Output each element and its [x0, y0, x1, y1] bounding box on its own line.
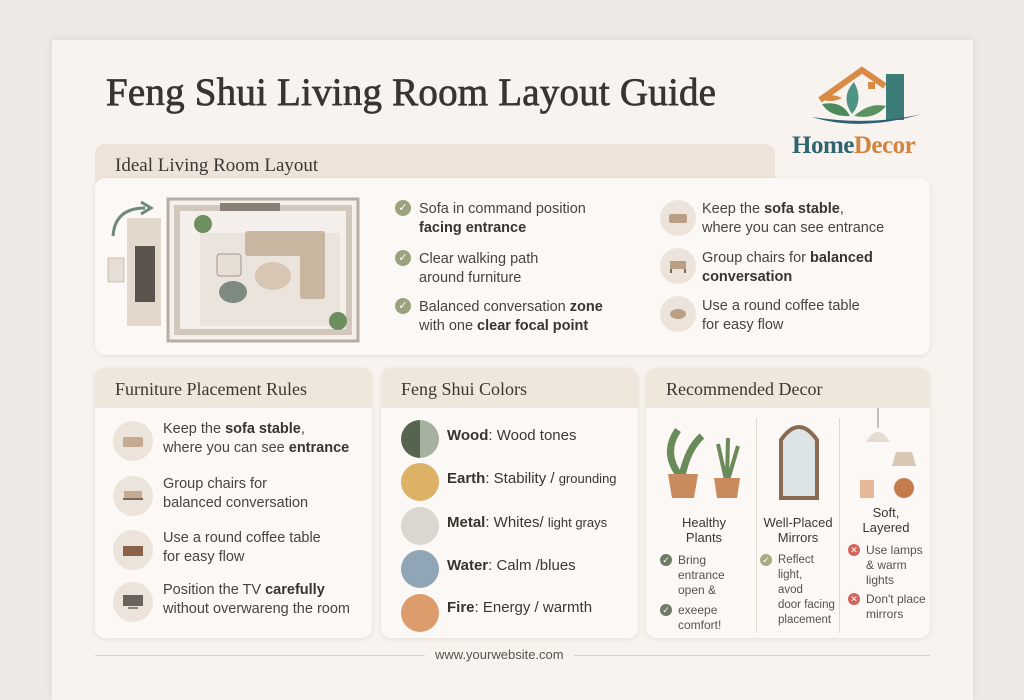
column: plants: entrance — [678, 568, 725, 582]
column: lighting — [848, 408, 926, 621]
column: lighting: Soft, — [873, 505, 899, 520]
column: mirrors: Reflect — [778, 554, 814, 566]
column: plants: open & — [678, 583, 716, 597]
column: plants — [660, 428, 740, 632]
top panel header tab: Ideal Living Room Layout — [115, 155, 318, 176]
column: plants: ✓ — [662, 605, 670, 615]
tips with icons: Group chairs for balanced — [702, 250, 873, 266]
column: plants: Healthy — [682, 515, 726, 530]
panel: furniture placement rules: balanced conversation — [163, 495, 308, 511]
column: mirrors: Well-Placed — [763, 515, 833, 530]
column: plants: Bring — [678, 553, 706, 567]
column: plants: exeepe — [678, 603, 717, 617]
top panel header tab — [95, 144, 775, 182]
panel: feng shui colors: Fire: Energy / warmth — [447, 599, 592, 616]
checklist: layout tips: Balanced conversation zone — [419, 299, 603, 315]
panel: feng shui colors: Metal: Whites/ light grays — [447, 514, 607, 531]
checklist: layout tips: ✓ — [398, 300, 408, 312]
panel: recommended decor: Recommended Decor — [666, 379, 822, 399]
column: lighting: mirrors — [866, 607, 903, 621]
title: Feng Shui Living Room Layout Guide — [106, 71, 716, 114]
column: mirrors: light, — [778, 569, 802, 581]
column: lighting: Don't place — [866, 592, 926, 606]
column: lighting: lights — [866, 573, 894, 587]
panel: feng shui colors — [381, 368, 638, 638]
footer: www.yourwebsite.com — [435, 647, 564, 662]
panel: furniture placement rules: Position the TV carefully — [163, 582, 325, 598]
column: mirrors: avod — [778, 584, 803, 596]
floor plan illustration — [108, 198, 360, 342]
panel: ideal layout — [95, 178, 930, 355]
column: lighting: ✕ — [850, 594, 858, 604]
checklist: layout tips: ✓ — [398, 252, 408, 264]
tips with icons: where you can see entrance — [702, 220, 884, 236]
column: plants: Plants — [686, 530, 722, 545]
column: lighting: & warm — [866, 558, 907, 572]
panel: furniture placement rules: Keep the sofa stable, — [163, 421, 305, 437]
panel: feng shui colors: Earth: Stability / grounding — [447, 470, 617, 487]
column: mirrors: placement — [778, 614, 831, 626]
logo: HomeDecor: HomeDecor — [792, 132, 915, 159]
checklist: layout tips: Clear walking path — [419, 251, 538, 267]
tips with icons: conversation — [702, 269, 792, 285]
checklist: layout tips: around furniture — [419, 270, 521, 286]
panel: recommended decor — [646, 368, 930, 638]
column: lighting: Use lamps — [866, 543, 923, 557]
panel: feng shui colors: Water: Calm /blues — [447, 557, 576, 574]
checklist: layout tips — [395, 200, 603, 334]
panel: feng shui colors: Wood: Wood tones — [447, 427, 576, 444]
column: plants: ✓ — [662, 555, 670, 565]
tips with icons: Use a round coffee table — [702, 298, 860, 314]
panel: furniture placement rules: for easy flow — [163, 549, 244, 565]
column: mirrors: ✓ — [762, 555, 770, 565]
panel: furniture placement rules — [95, 368, 372, 638]
checklist: layout tips: with one clear focal point — [419, 318, 588, 334]
column: lighting: Layered — [862, 520, 909, 535]
panel: furniture placement rules: Group chairs for — [163, 476, 267, 492]
column: mirrors: Mirrors — [778, 530, 818, 545]
logo: HomeDecor — [792, 66, 922, 159]
column: lighting: ✕ — [850, 545, 858, 555]
tips with icons: Keep the sofa stable, — [702, 201, 844, 217]
panel: furniture placement rules: where you can see entrance — [163, 440, 349, 456]
panel: furniture placement rules: without overwareng the room — [163, 601, 350, 617]
panel: furniture placement rules: Use a round coffee table — [163, 530, 321, 546]
column: mirrors — [756, 418, 840, 633]
tips with icons — [660, 200, 884, 333]
checklist: layout tips: ✓ — [398, 202, 408, 214]
column: mirrors: door facing — [778, 599, 835, 611]
checklist: layout tips: Sofa in command position — [419, 201, 586, 217]
checklist: layout tips: facing entrance — [419, 220, 526, 236]
panel: feng shui colors: Feng Shui Colors — [401, 379, 527, 399]
column: plants: comfort! — [678, 618, 721, 632]
tips with icons: for easy flow — [702, 317, 783, 333]
panel: furniture placement rules: Furniture Placement Rules — [115, 379, 307, 399]
